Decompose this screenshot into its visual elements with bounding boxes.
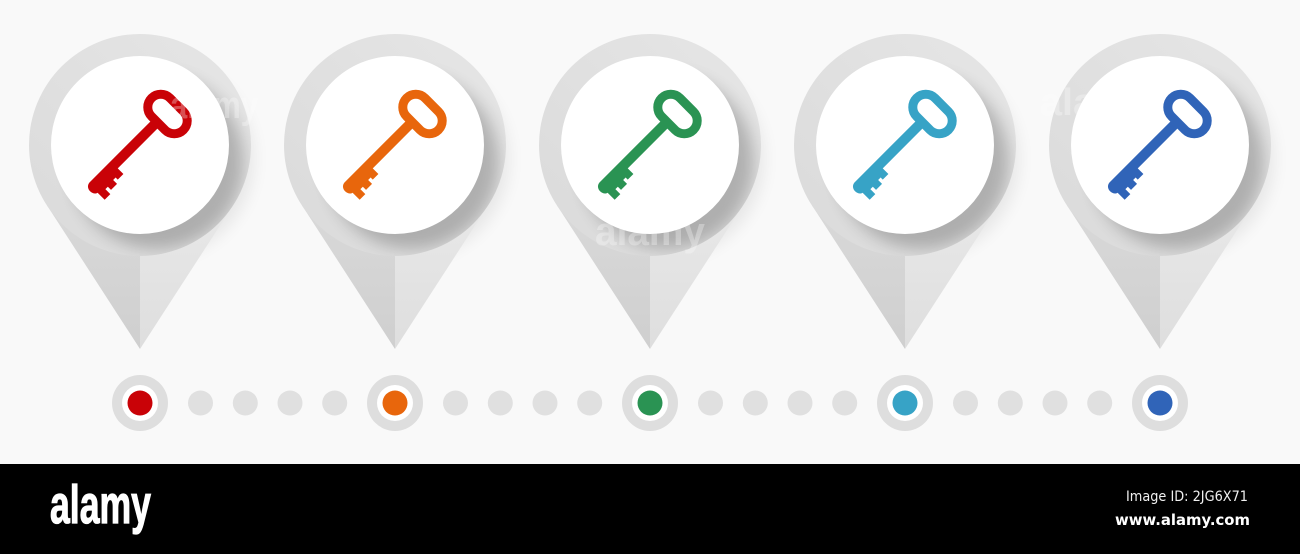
small dots 3	[698, 390, 857, 416]
marker 1: red	[112, 375, 168, 431]
small dots 4	[953, 390, 1112, 416]
image id: Image ID: 2JG6X71	[1126, 489, 1248, 505]
timeline of dots	[112, 375, 1188, 431]
watermarks: alamy	[595, 210, 706, 254]
website: www.alamy.com	[1115, 511, 1250, 529]
icon: green key	[595, 89, 703, 203]
marker 3: green	[622, 375, 678, 431]
logo: alamy: alamy	[50, 475, 151, 535]
marker 2: orange	[367, 375, 423, 431]
small dots 2	[443, 390, 602, 416]
icon: red key	[85, 89, 193, 203]
pin 5: blue key	[1049, 34, 1274, 349]
icon: light blue key	[850, 89, 958, 203]
marker 5: blue	[1132, 375, 1188, 431]
watermarks: alamy	[170, 85, 258, 127]
pin 4: light blue key	[794, 34, 1019, 349]
watermarks	[170, 82, 1152, 254]
marker 4: light blue	[877, 375, 933, 431]
pin 1: red key	[29, 34, 254, 349]
icon: blue key	[1105, 89, 1213, 203]
small dots 1	[188, 390, 347, 416]
icon: orange key	[340, 89, 448, 203]
watermarks: alamy	[1040, 82, 1152, 124]
footer band	[0, 464, 1300, 554]
pin 2: orange key	[284, 34, 509, 349]
pin 3: green key	[539, 34, 764, 349]
